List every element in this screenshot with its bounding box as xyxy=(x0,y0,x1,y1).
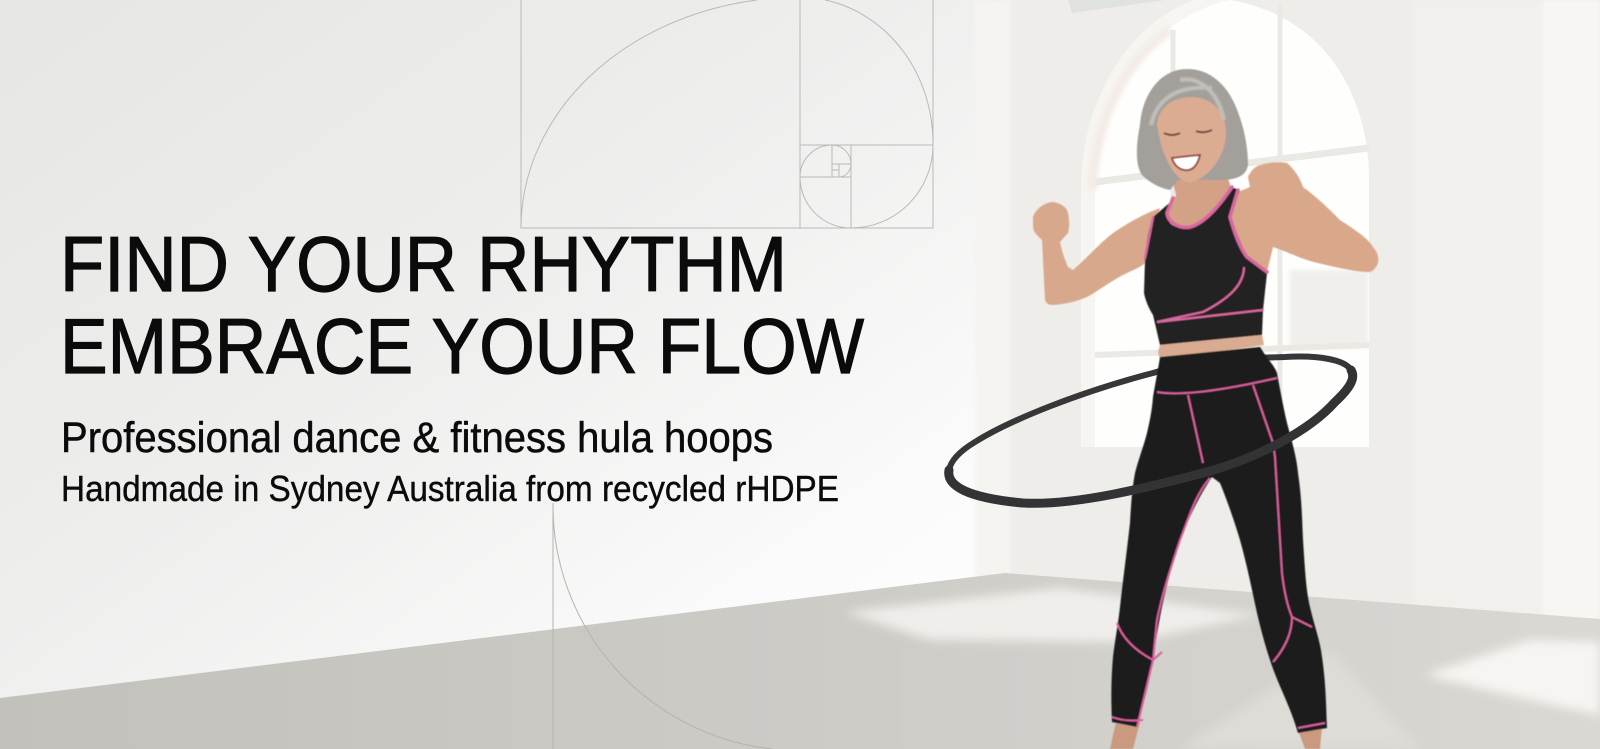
heading line 2: EMBRACE YOUR FLOW xyxy=(60,302,864,390)
heading line 1: FIND YOUR RHYTHM xyxy=(60,220,787,308)
golden spiral upper xyxy=(521,0,933,228)
woman xyxy=(1033,69,1378,749)
hoop front xyxy=(949,370,1353,503)
subheading: Professional dance & fitness hula hoops xyxy=(61,414,773,462)
leggings xyxy=(1111,347,1327,733)
crop top trim xyxy=(1145,187,1267,322)
feet xyxy=(1110,722,1322,749)
floor sun patches xyxy=(845,588,1600,749)
face xyxy=(1157,97,1226,183)
tagline: Handmade in Sydney Australia from recycled rHDPE xyxy=(61,468,839,509)
crop top xyxy=(1144,187,1267,345)
neck and chest xyxy=(1165,170,1232,232)
hair highlights xyxy=(1151,79,1224,125)
leggings seams xyxy=(1112,378,1325,728)
midriff xyxy=(1158,335,1264,360)
arm left xyxy=(1033,202,1160,305)
golden spiral lower xyxy=(553,503,772,749)
arm right xyxy=(1230,162,1378,272)
arched window xyxy=(1068,0,1369,447)
hair back xyxy=(1137,69,1248,190)
hoop back xyxy=(949,357,1351,470)
window blind xyxy=(1068,0,1165,13)
facial features xyxy=(1164,130,1212,170)
